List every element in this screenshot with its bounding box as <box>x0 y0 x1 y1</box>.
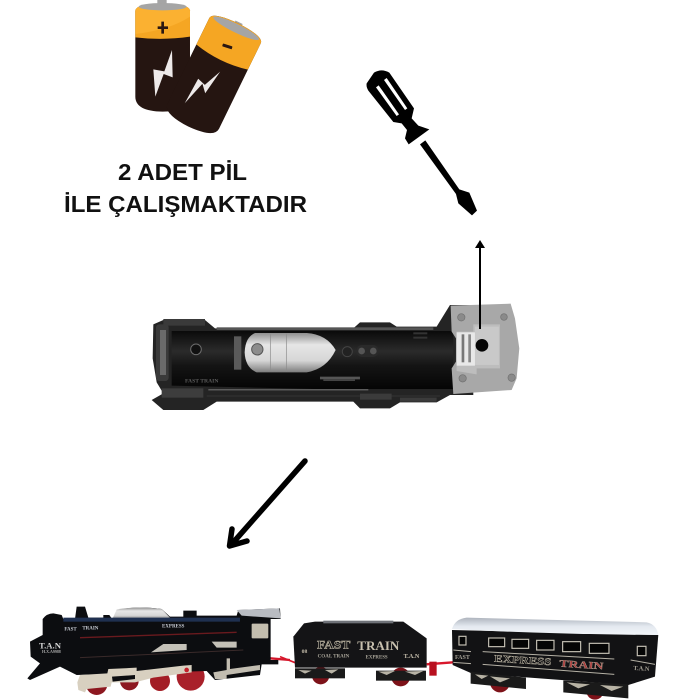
photo: coal tender: TRAIN <box>357 639 399 653</box>
heading: battery note <box>64 159 307 217</box>
tender body <box>293 622 427 668</box>
screw hole <box>476 339 488 352</box>
windows <box>459 636 646 656</box>
photo: coal tender: EXPRESS <box>366 656 388 661</box>
connecting rod <box>77 665 192 692</box>
arrow: down-left to assembled train <box>230 461 305 546</box>
silver roof <box>452 618 658 635</box>
wheels <box>312 667 329 684</box>
arrow: up to screw hole <box>475 240 485 329</box>
photo: locomotive: TRAIN <box>82 627 99 632</box>
heading: battery note: İLE ÇALIŞMAKTADIR <box>64 191 307 217</box>
blue running plate <box>63 618 240 622</box>
bogies <box>295 668 345 678</box>
icon: two batteries <box>135 0 265 139</box>
small domes <box>342 347 352 357</box>
icon: screwdriver <box>367 70 477 215</box>
rear gear <box>213 658 260 679</box>
wheels <box>490 672 510 692</box>
photo: coal tender: T.A.N <box>404 653 420 660</box>
cab window <box>252 624 268 638</box>
left battery <box>135 0 190 112</box>
chimney <box>191 344 201 355</box>
passenger carriage: TRAIN <box>559 659 605 672</box>
silver dome <box>113 607 170 619</box>
silver dome <box>245 333 336 372</box>
passenger carriage: FAST <box>455 655 470 661</box>
red stripe <box>80 632 237 638</box>
photo: locomotive: H.X.A9988 <box>42 649 61 654</box>
photo: locomotive underside with battery cover <box>152 304 519 410</box>
photo: locomotive: T.A.N <box>39 640 62 650</box>
bogies <box>471 672 526 689</box>
body <box>452 630 658 685</box>
loco labels: FAST <box>64 627 77 632</box>
silver side panels <box>151 644 187 652</box>
chassis <box>152 305 473 410</box>
body <box>27 607 281 680</box>
boiler label: FAST TRAIN <box>185 379 219 385</box>
right battery <box>162 10 265 139</box>
passenger carriage <box>452 618 658 700</box>
photo: locomotive: EXPRESS <box>162 625 185 630</box>
front buffer <box>156 324 169 381</box>
photo: coal tender <box>280 618 658 700</box>
photo: coal tender: 08 <box>302 649 307 655</box>
cab roof <box>237 608 281 618</box>
lines <box>453 650 655 674</box>
wheels <box>86 674 107 695</box>
coupling <box>270 658 290 660</box>
boiler <box>172 331 453 389</box>
silver cab with screw cover <box>451 304 519 394</box>
red coupling <box>280 657 297 663</box>
carriage labels: EXPRESS <box>494 654 552 668</box>
side rails <box>163 319 205 326</box>
tender labels: FAST <box>317 638 350 652</box>
heading: battery note: 2 ADET PİL <box>118 159 247 185</box>
photo: coal tender: COAL TRAIN <box>318 654 350 659</box>
passenger carriage: T.A.N <box>633 665 650 673</box>
photo: locomotive <box>27 607 290 695</box>
